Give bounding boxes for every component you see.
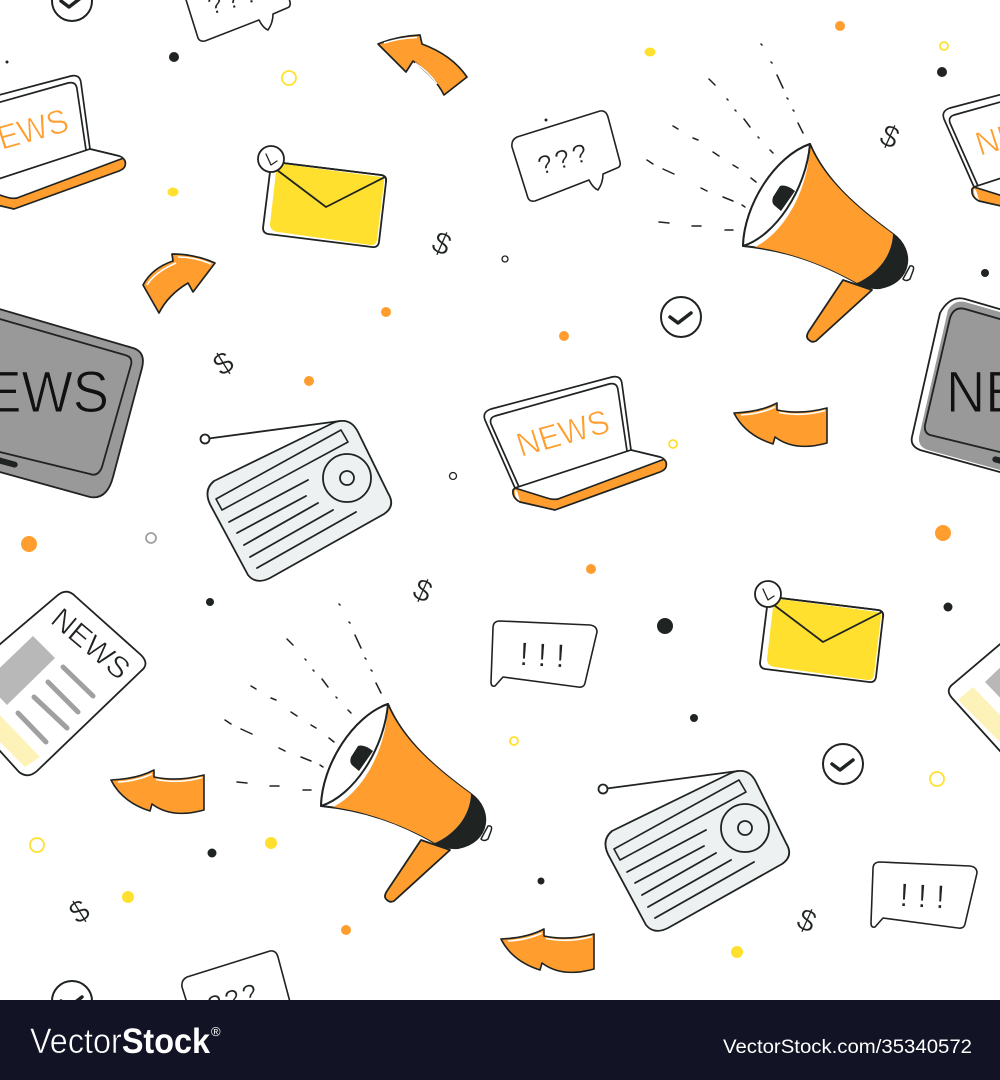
speech bubble: question marks top — [182, 0, 290, 41]
TV screen: right edge — [912, 298, 1000, 497]
arrow: flat lower left — [111, 770, 204, 813]
check icon: bottom — [52, 981, 92, 1021]
speech bubble: exclamation centre — [491, 621, 597, 687]
speech bubble: question marks bottom — [182, 951, 290, 1041]
envelope: upper — [258, 146, 386, 247]
registered mark: ® — [211, 1024, 221, 1039]
radio: lower right — [598, 771, 789, 931]
speech bubble: exclamation right: !!! — [899, 876, 955, 916]
radio: upper left — [200, 421, 391, 581]
speech bubble: question marks bottom: ??? — [204, 976, 264, 1021]
newspaper: left edge: NEWS — [45, 602, 136, 686]
speech bubble: exclamation right — [871, 862, 977, 928]
envelope: lower — [755, 581, 883, 682]
speech bubble: question marks centre — [512, 111, 620, 201]
dollar signs: $ — [875, 117, 905, 156]
laptop: top left — [0, 76, 125, 209]
speech bubble: question marks centre: ??? — [534, 136, 594, 181]
check icon: centre — [661, 297, 701, 337]
dollar signs: $ — [207, 344, 240, 383]
dollar signs: $ — [63, 892, 96, 931]
dollar signs — [63, 117, 905, 940]
dollar signs: $ — [792, 901, 822, 940]
arrow: flat middle — [734, 403, 827, 446]
arrow: top curved — [378, 35, 467, 95]
arrow: flat bottom centre — [501, 929, 594, 972]
check icon: top — [52, 0, 92, 21]
megaphone: top right — [647, 44, 914, 342]
TV screen: left edge — [0, 298, 143, 497]
dollar signs: $ — [427, 224, 457, 263]
laptop: centre — [484, 377, 666, 510]
footer logo: VectorStock — [30, 1022, 210, 1061]
megaphone: bottom centre — [225, 604, 492, 902]
dollar signs: $ — [408, 571, 438, 610]
laptop: centre: NEWS — [512, 402, 614, 464]
footer url: VectorStock.com/35340572 — [723, 1036, 972, 1058]
newspaper: left edge — [0, 592, 145, 775]
speech bubble: exclamation centre: !!! — [519, 635, 575, 675]
laptop: top right — [943, 76, 1000, 209]
footer bar — [0, 1000, 1000, 1080]
check icon: right — [823, 744, 863, 784]
newspaper: right edge — [949, 592, 1000, 775]
arrow: left curved — [143, 254, 215, 313]
